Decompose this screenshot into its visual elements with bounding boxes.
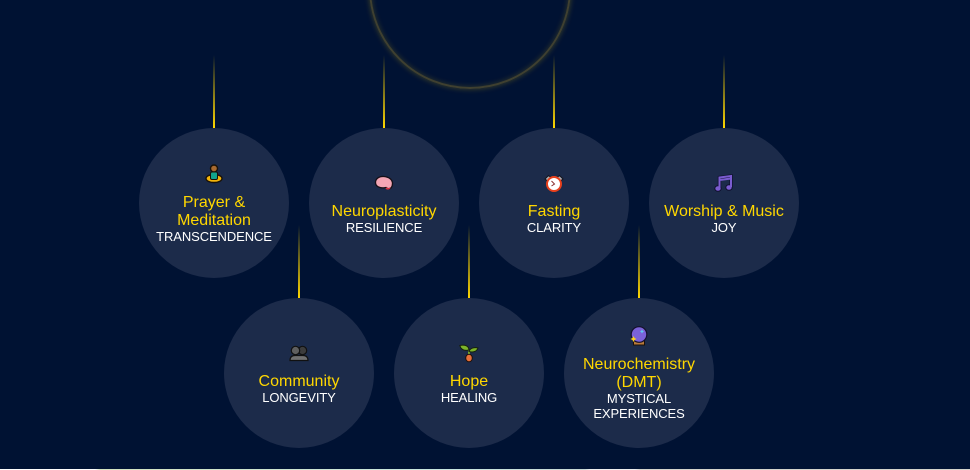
top glowing ring — [368, 0, 570, 89]
heading: neurochemistry (DMT): Neurochemistry (DMT) — [583, 356, 695, 391]
icon: musical notes — [714, 174, 733, 192]
panel: worship and music — [649, 128, 799, 278]
label: mystical experiences: MYSTICAL EXPERIENCES — [593, 391, 685, 421]
heading: hope: Hope — [450, 372, 488, 390]
connector: prayer and meditation — [213, 55, 215, 128]
connector: neurochemistry — [638, 225, 640, 298]
label: joy: JOY — [712, 220, 736, 234]
connector: neuroplasticity — [383, 55, 385, 128]
icon: seedling — [459, 344, 479, 362]
connector: worship and music — [723, 55, 725, 128]
heading: community: Community — [259, 372, 339, 390]
label: longevity: LONGEVITY — [262, 390, 336, 404]
panel: neuroplasticity — [309, 128, 459, 278]
connector: hope — [468, 225, 470, 298]
heading: fasting: Fasting — [528, 202, 580, 220]
label: resilience: RESILIENCE — [346, 220, 422, 234]
connector: fasting — [553, 55, 555, 128]
panel: fasting — [479, 128, 629, 278]
icon: silhouettes of people — [289, 346, 309, 362]
panel: hope — [394, 298, 544, 448]
label: clarity: CLARITY — [527, 220, 581, 234]
panel: neurochemistry — [564, 298, 714, 448]
panel: community — [224, 298, 374, 448]
panel: prayer and meditation — [139, 128, 289, 278]
heading: worship and music: Worship & Music — [664, 202, 784, 220]
heading: neuroplasticity: Neuroplasticity — [332, 202, 436, 220]
label: transcendence: TRANSCENDENCE — [156, 228, 272, 244]
icon: alarm clock — [544, 175, 564, 192]
icon: person meditating — [205, 164, 223, 184]
label: healing: HEALING — [441, 390, 497, 404]
icon: brain — [374, 176, 394, 190]
heading: prayer and meditation: Prayer & Meditation — [177, 194, 251, 228]
icon: crystal ball — [630, 326, 648, 346]
connector: community — [298, 225, 300, 298]
